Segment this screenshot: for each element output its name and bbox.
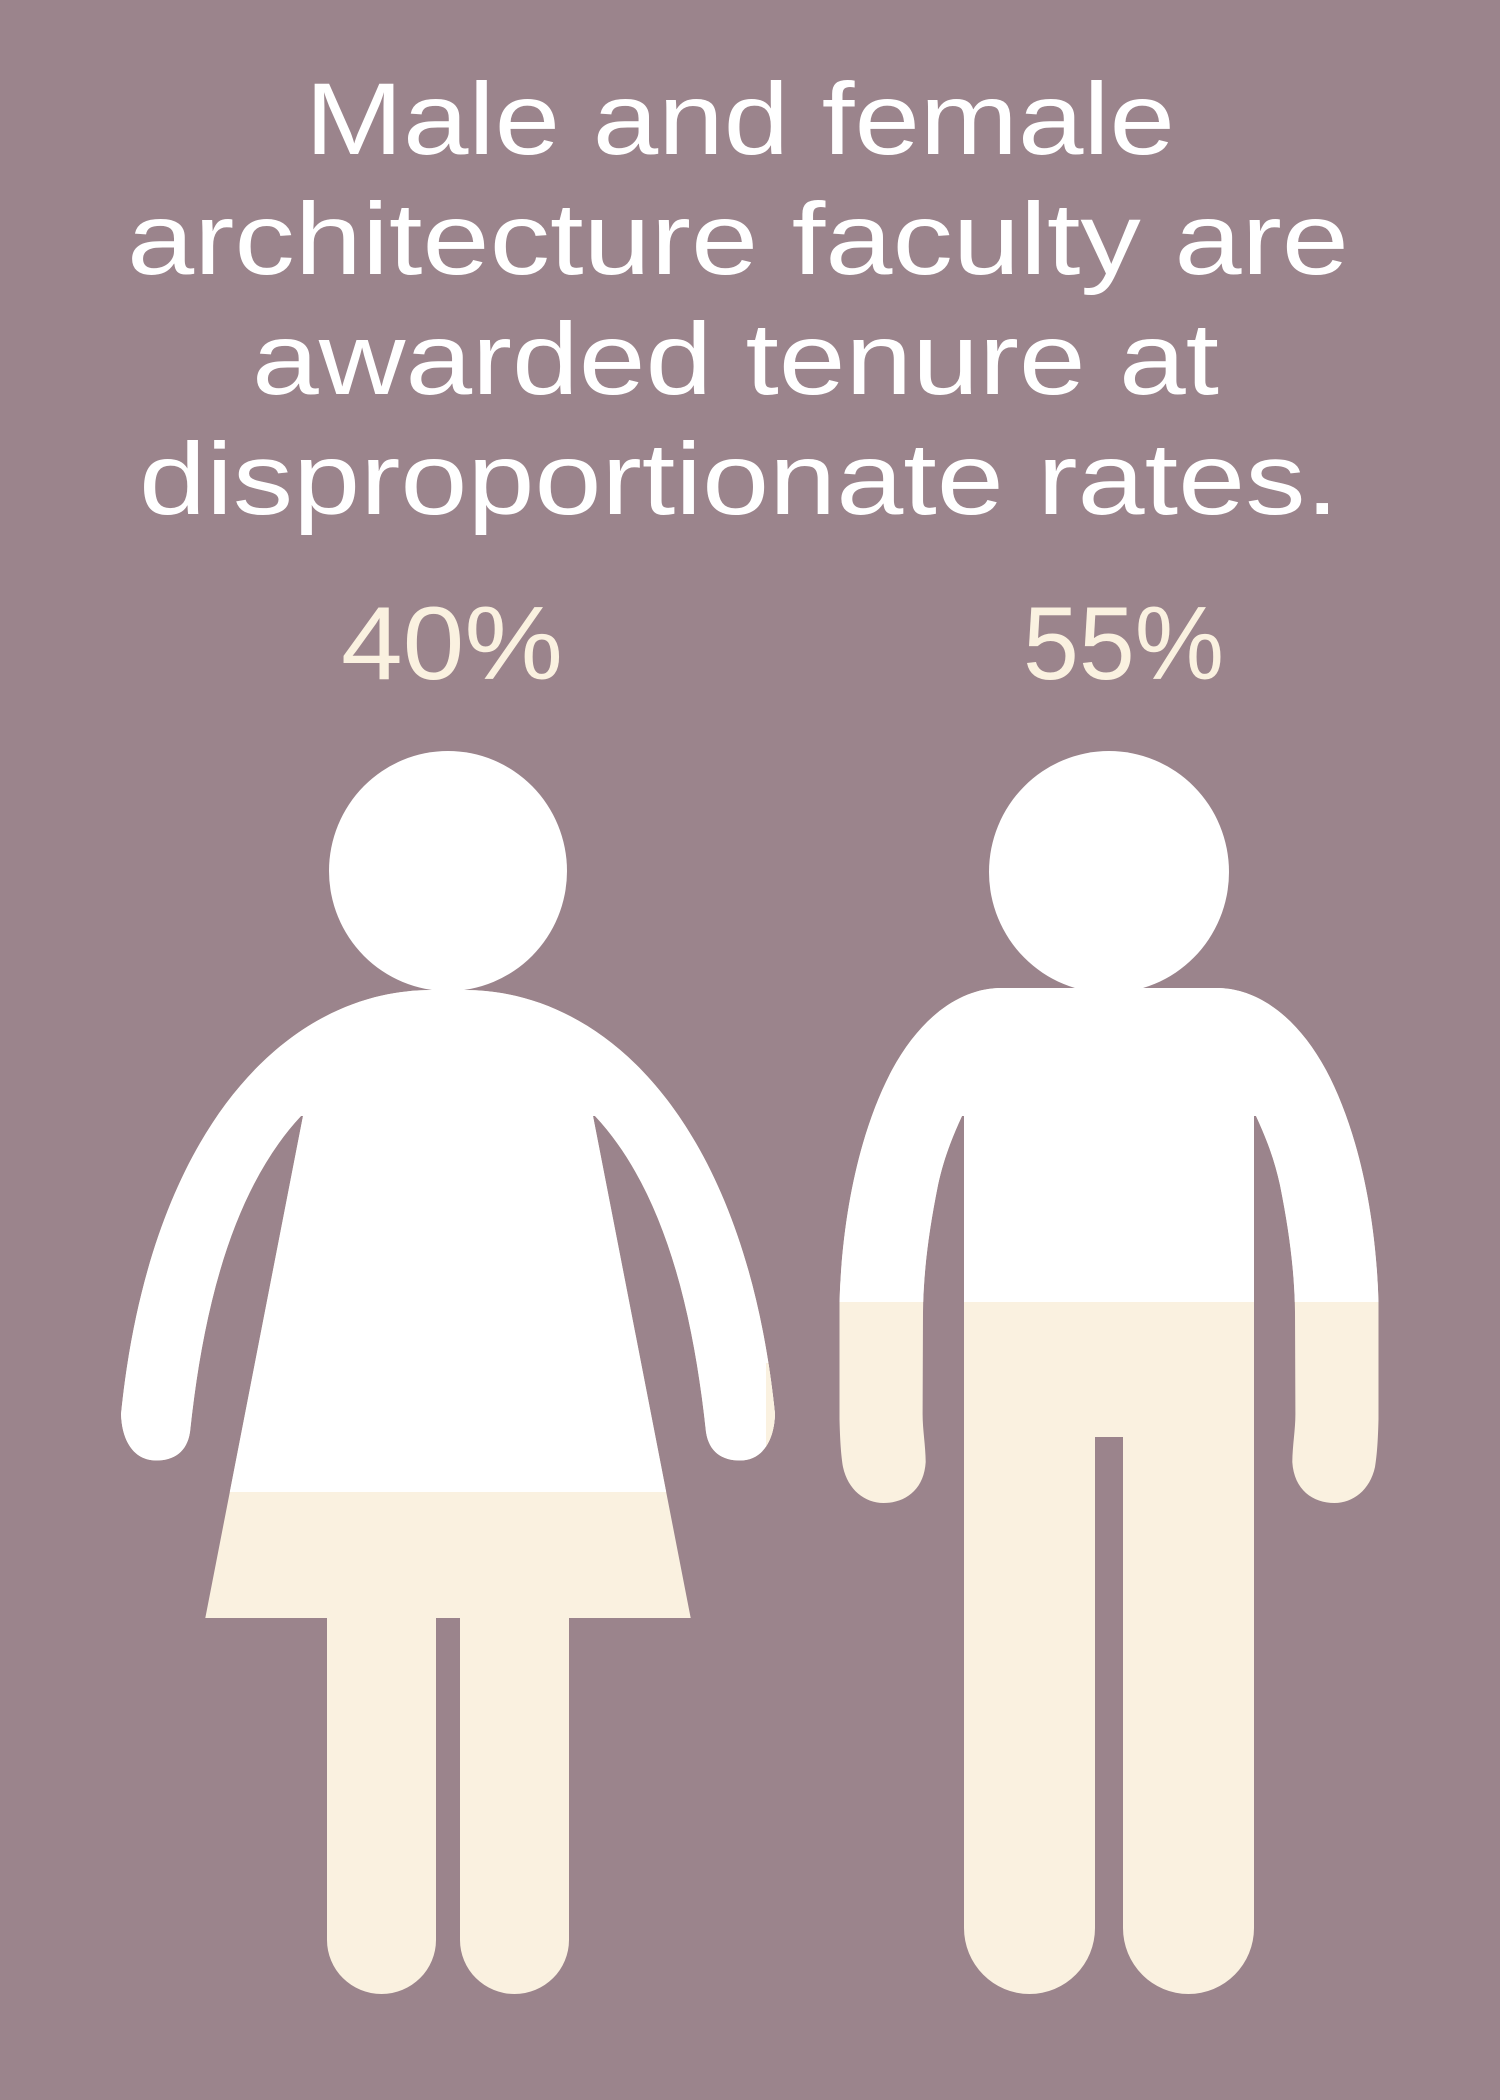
icon: female figure filled to 40%	[121, 751, 775, 1994]
icon: male figure filled to 55%	[840, 751, 1378, 1994]
title	[127, 62, 1349, 536]
male percentage: 55%: 55%	[1023, 586, 1224, 702]
title: awarded tenure at	[252, 302, 1219, 416]
female percentage: 40%: 40%	[341, 586, 563, 702]
title: Male and female	[305, 62, 1175, 176]
title: disproportionate rates.	[139, 422, 1339, 536]
infographic canvas	[121, 80, 1378, 1994]
title: architecture faculty are	[127, 182, 1349, 296]
